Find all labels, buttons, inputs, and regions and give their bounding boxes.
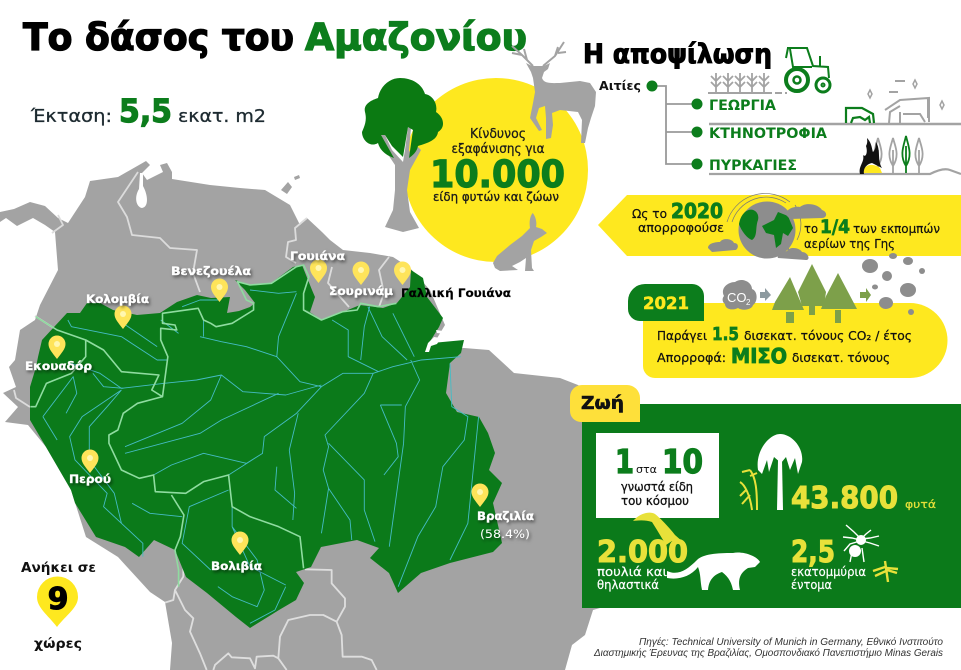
circle: extinction risk: Κίνδυνος [470,127,526,142]
stat: birds and mammals: θηλαστικά [597,578,659,592]
tag: life [570,385,640,422]
stat: birds and mammals: πουλιά και [597,565,667,579]
panel: 2021: δισεκατ. τόνους CO₂ / έτος [744,328,912,343]
country labels: Σουρινάμ [329,284,394,298]
area stat: Έκταση: [30,106,112,127]
sources [593,637,944,659]
icon: CO2 cloud: 2 [746,298,751,307]
panel: 2021: ΜΙΣΟ [731,344,787,368]
icon: spider [843,525,879,562]
small CO2 clouds [862,253,925,315]
stat: insects: εκατομμύρια [791,565,866,579]
banner: until 2020: 2020 [671,199,723,223]
icon: deer [512,42,596,143]
panel: 2021: δισεκατ. τόνους [792,350,890,365]
icon: jaguar [667,553,760,590]
panel: wildlife [570,385,961,608]
banner: until 2020: το [804,222,818,236]
card: 1 in 10 species: του κόσμου [621,494,689,508]
icon: CO2 cloud: CO [727,290,746,305]
banner: until 2020 [598,193,961,260]
panel: 2021: 2021 [643,294,689,314]
icon: rabbit [493,213,547,271]
stat: birds and mammals [597,535,688,592]
circle: extinction risk [404,78,588,262]
stat: plants: 43.800 [791,481,898,516]
white Amazon delta islands [425,330,451,352]
circle: extinction risk: είδη φυτών και ζώων [433,190,559,204]
icon: globe with clouds [708,193,826,260]
icon: CO2 cloud [723,280,757,310]
country labels: Βενεζουέλα [171,264,251,278]
causes connector lines [652,86,693,164]
banner: until 2020: των εκπομπών [853,222,940,236]
title: Το δάσος του [23,16,294,59]
icon: pasture with cows [709,80,961,124]
map: northern South America [0,161,600,670]
card: 1 in 10 species: 10 [662,442,703,481]
banner: until 2020: 1/4 [820,216,850,238]
heading: deforestation: Η αποψίλωση [583,39,772,70]
grey country borders north [14,172,389,407]
icon: fire and trees [709,136,961,174]
icon: tractor [786,48,830,92]
badge: belongs to 9 countries: χώρες [34,637,82,652]
arrow: into trees [760,288,771,301]
cause: agriculture: ΓΕΩΡΓΙΑ [709,98,776,114]
icon: tree [362,78,443,232]
area stat [30,92,266,130]
lake Maracaibo [136,173,147,208]
stat: insects: έντομα [791,578,832,592]
stat: insects [791,535,866,592]
title [23,16,527,59]
icon: yellow plant [740,470,757,510]
banner: until 2020: απορροφούσε [638,221,724,235]
sources: Πηγές: Technical University of Munich in Germany, Εθνικό Ινστιτούτο [639,637,944,648]
causes tree [599,78,827,174]
label: French Guiana: Γαλλική Γουιάνα [401,286,511,300]
causes label: Αιτίες [599,78,641,93]
country labels: (58.4%) [480,527,530,541]
sources: Διαστημικής Έρευνας της Βραζιλίας, Ομοσπονδιακό Πανεπιστήμιο Minas Gerais [593,648,943,659]
map pins [48,260,488,555]
country labels: Κολομβία [86,292,149,306]
island: Trinidad [281,175,300,194]
country labels: Γουιάνα [290,249,345,263]
icon: dragonfly [873,561,898,582]
card: 1 in 10 species: στα [636,463,657,476]
badge: belongs to 9 countries: Ανήκει σε [21,561,96,576]
absorption line: Απορροφά: [657,350,726,365]
card: 1 in 10 species: γνωστά είδη [621,480,693,494]
Amazon rainforest green area [30,265,502,628]
emissions line: Παράγει [657,328,707,343]
stat: birds and mammals: 2.000 [597,535,688,570]
country labels: Βολιβία [211,559,262,573]
grey country borders south [165,567,377,670]
cause: livestock: ΚΤΗΝΟΤΡΟΦΙΑ [709,126,827,142]
pale national borders over forest [30,265,396,587]
cause: fires: ΠΥΡΚΑΓΙΕΣ [709,158,797,174]
country labels [25,249,534,573]
country labels: Εκουαδόρ [25,359,92,373]
land: grey base map [0,161,600,670]
badge: belongs to 9 countries: 9 [48,582,68,617]
card: 1 in 10 species: 1 [615,442,634,481]
arrow: out of trees [860,288,871,302]
title: Αμαζονίου [305,16,527,59]
country labels: Βραζιλία [477,509,534,523]
causes dots [646,80,702,170]
circle: extinction risk: 10.000 [430,153,565,196]
rivers [43,290,479,623]
stat: plants: φυτά [905,498,936,511]
panel: 2021 [628,253,948,378]
area stat: 5,5 [119,92,172,130]
card: 1 in 10 species [596,433,719,518]
banner: until 2020: αερίων της Γης [804,237,895,251]
circle: extinction risk: εξαφάνισης για [452,142,544,157]
panel: 2021: 1.5 [712,324,739,345]
icon: wheat field [708,73,787,93]
stat: insects: 2,5 [791,535,835,570]
country labels: Περού [69,472,111,486]
icon: toucan [633,513,683,545]
badge: belongs to 9 countries [21,561,96,652]
banner: until 2020: Ως το [632,207,667,221]
icon: palm tree [758,434,802,510]
area stat: εκατ. m2 [178,106,266,127]
tag: life: Ζωή [581,393,624,414]
icon: three pine trees [772,264,857,323]
